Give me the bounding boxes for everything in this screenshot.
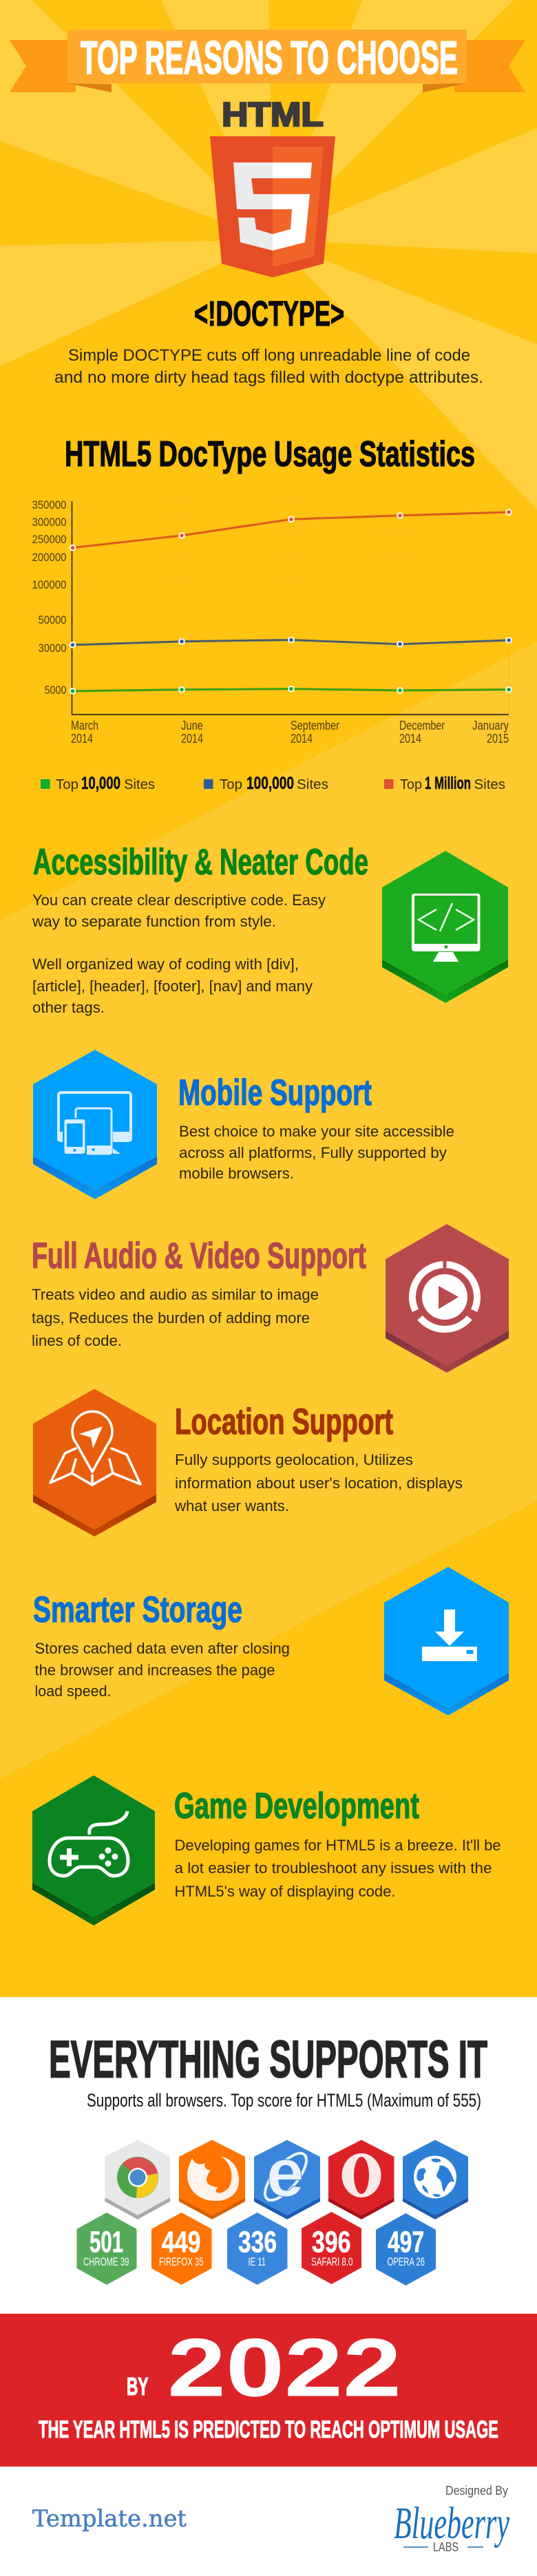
icon: chrome <box>105 2140 170 2219</box>
text block: lines of code. <box>32 1332 122 1349</box>
text block: Treats video and audio as similar to image <box>32 1286 319 1303</box>
score: safari: 396 <box>312 2225 351 2259</box>
y axis labels: 50000 <box>39 613 66 626</box>
title ribbon <box>10 30 525 92</box>
text block: a lot easier to troubleshoot any issues with the <box>175 1859 492 1877</box>
icon: HTML5 shield <box>210 136 335 277</box>
background <box>0 0 537 1997</box>
score: opera: 497 <box>388 2225 424 2259</box>
x axis labels: September <box>291 719 339 732</box>
icon: gamepad <box>32 1775 155 1925</box>
by label: BY <box>127 2372 149 2400</box>
x axis labels: 2014 <box>71 732 93 746</box>
x axis labels: 2014 <box>181 732 203 746</box>
doctype description <box>54 346 483 387</box>
y axis labels: 5000 <box>44 684 66 697</box>
score: opera <box>376 2213 436 2285</box>
legend: Sites <box>124 777 155 792</box>
y axis labels: 100000 <box>32 578 66 591</box>
y axis labels: 30000 <box>39 642 66 655</box>
y axis labels <box>32 498 66 697</box>
text block: Best choice to make your site accessible <box>179 1123 454 1140</box>
heading: Full Audio & Video Support <box>32 1236 366 1276</box>
score: opera: OPERA 26 <box>387 2255 425 2268</box>
score: safari: SAFARI 8.0 <box>311 2255 352 2268</box>
icon: play <box>386 1224 509 1373</box>
score: chrome: CHROME 39 <box>83 2255 129 2268</box>
year: 2022 <box>167 2321 401 2414</box>
x axis labels: December <box>399 719 445 732</box>
legend: 100,000 <box>246 774 294 793</box>
text block: across all platforms, Fully supported by <box>179 1144 447 1161</box>
text block: load speed. <box>34 1682 112 1700</box>
text block: Well organized way of coding with [div], <box>32 956 299 973</box>
legend: 10,000 <box>81 774 120 793</box>
HTML wordmark: HTML <box>222 96 324 134</box>
heading: Mobile Support <box>178 1073 372 1113</box>
panel: game development <box>32 1775 501 1925</box>
text block: Developing games for HTML5 is a breeze. It'll be <box>175 1837 501 1854</box>
x axis labels: January <box>472 719 509 732</box>
blueberry labs logo: LABS <box>433 2540 459 2554</box>
text block: the browser and increases the page <box>34 1662 275 1678</box>
line chart <box>32 498 512 746</box>
text block: mobile browsers. <box>179 1165 294 1182</box>
icon: globe <box>403 2140 468 2219</box>
doctype description: and no more dirty head tags filled with doctype attributes. <box>54 368 483 387</box>
text block: You can create clear descriptive code. Easy <box>32 891 326 909</box>
heading: Location Support <box>175 1402 393 1442</box>
panel: footer <box>0 2467 537 2576</box>
score: ie: 336 <box>238 2225 277 2259</box>
legend <box>41 774 505 793</box>
icon: internet explorer: e <box>266 2135 304 2210</box>
score: firefox <box>151 2213 212 2285</box>
x axis labels: 2014 <box>399 732 421 746</box>
x axis labels: 2014 <box>291 732 313 746</box>
text block <box>32 1286 319 1349</box>
legend: Top <box>220 777 242 792</box>
text block: Fully supports geolocation, Utilizes <box>175 1451 413 1468</box>
panel: 2022 prediction <box>0 2314 537 2467</box>
text block <box>179 1123 454 1182</box>
text block: tags, Reduces the burden of adding more <box>32 1309 310 1327</box>
x axis labels: March <box>71 719 98 732</box>
text block: information about user's location, displays <box>175 1475 463 1492</box>
heading: Accessibility & Neater Code <box>33 842 368 883</box>
x axis labels <box>71 719 509 746</box>
icon: opera <box>328 2140 394 2219</box>
legend: Top <box>56 777 78 792</box>
legend: 1 Million <box>425 774 471 793</box>
panel: accessibility and neater code <box>32 842 508 1016</box>
score: firefox: FIREFOX 35 <box>159 2255 204 2268</box>
score: ie <box>227 2213 288 2285</box>
doctype description: Simple DOCTYPE cuts off long unreadable line of code <box>68 346 470 365</box>
y axis labels: 350000 <box>32 498 66 511</box>
legend: Sites <box>297 777 328 792</box>
designed by: Designed By <box>445 2484 508 2498</box>
score: ie: IE 11 <box>248 2255 266 2268</box>
panel: location support <box>33 1389 463 1537</box>
text block: Stores cached data even after closing <box>34 1640 290 1657</box>
icon: devices <box>33 1050 157 1199</box>
score: safari <box>302 2212 361 2284</box>
panel: full audio and video support <box>32 1224 509 1373</box>
y axis labels: 300000 <box>32 516 66 529</box>
series: top 10,000 <box>70 686 512 694</box>
legend: Sites <box>474 777 505 792</box>
heading: Smarter Storage <box>33 1590 242 1630</box>
panel: mobile support <box>33 1050 454 1199</box>
doctype heading: <!DOCTYPE> <box>194 294 344 333</box>
heading: Game Development <box>174 1786 419 1826</box>
y axis labels: 250000 <box>32 533 66 546</box>
score: firefox: 449 <box>162 2225 201 2259</box>
text block <box>34 1640 290 1700</box>
y axis labels: 200000 <box>32 551 66 564</box>
text block: HTML5's way of displaying code. <box>175 1883 395 1900</box>
legend: Top <box>400 777 422 792</box>
icon: map pin <box>33 1389 156 1537</box>
text block: other tags. <box>32 999 105 1016</box>
text block <box>175 1837 501 1900</box>
text block: what user wants. <box>174 1497 289 1514</box>
panel: smarter storage <box>33 1567 509 1715</box>
icon: download <box>384 1567 509 1715</box>
icon: internet explorer <box>254 2135 320 2219</box>
template.net logo: Template.net <box>32 2505 187 2533</box>
icon: firefox <box>179 2140 245 2219</box>
series: top 100,000 <box>70 637 512 648</box>
text block <box>32 891 326 1016</box>
x axis labels: June <box>181 719 203 732</box>
x axis labels: 2015 <box>487 732 509 746</box>
score: chrome <box>77 2213 136 2285</box>
icon: code monitor <box>382 851 508 1003</box>
text block: [article], [header], [footer], [nav] and many <box>32 978 313 995</box>
text block <box>174 1451 463 1514</box>
series: top 1 million <box>70 509 512 551</box>
text block: way to separate function from style. <box>32 913 276 930</box>
panel: browser support <box>0 1997 537 2314</box>
score: chrome: 501 <box>90 2225 123 2259</box>
